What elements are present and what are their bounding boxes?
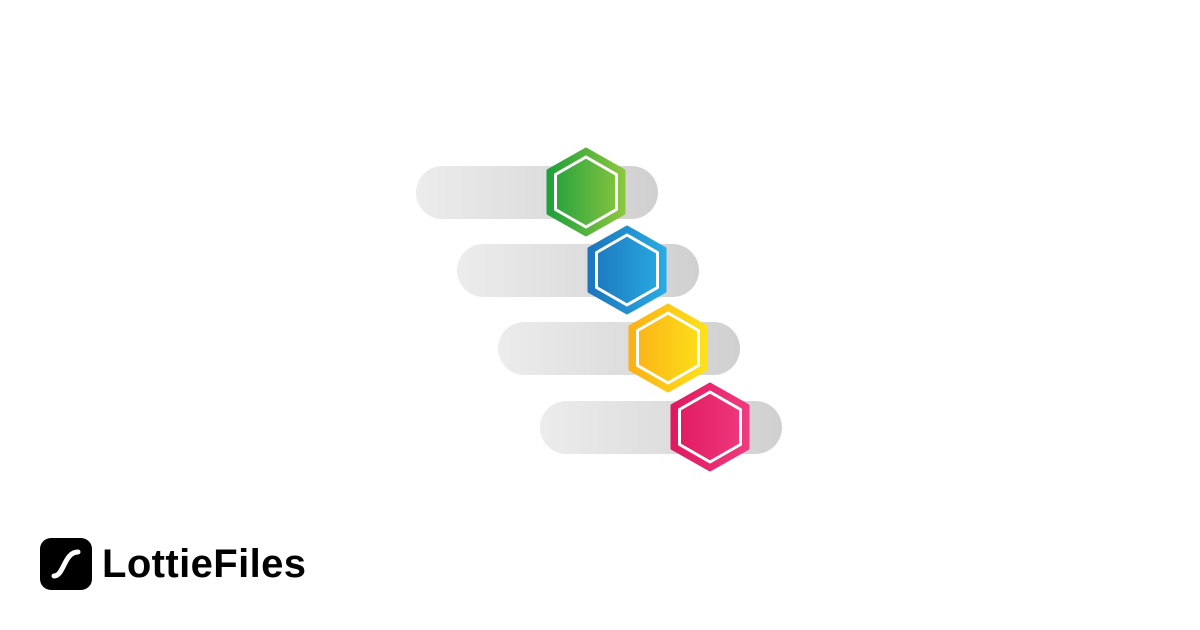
icon: lottie logo mark [40,538,92,590]
wordmark: LottieFiles [102,542,306,586]
hexagon blue [589,227,665,313]
hexagon pink [672,384,748,470]
logo [40,538,306,590]
bar 3 [498,305,740,391]
bar 4 [540,384,782,470]
hexagon yellow [630,305,706,391]
bar 1 [416,149,658,235]
hexagon green [548,149,624,235]
bar 2 [457,227,699,313]
